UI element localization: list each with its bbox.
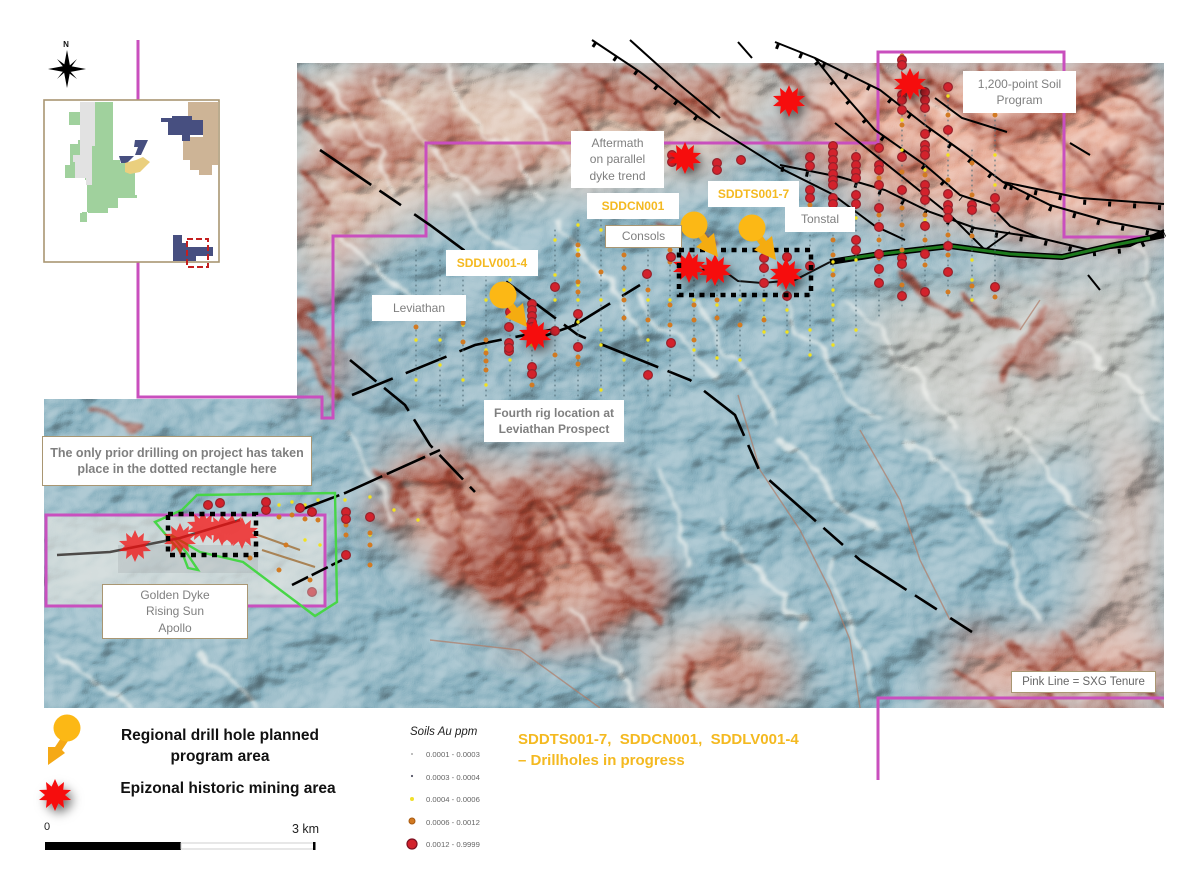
compass: N	[63, 40, 69, 49]
soils legend: Soils Au ppm	[410, 726, 478, 738]
soil sample grids	[250, 56, 995, 580]
soils legend	[407, 726, 481, 849]
historic mining stars on the main map	[519, 68, 926, 351]
label: soil program	[963, 71, 1076, 113]
terrain relief	[44, 63, 1164, 708]
label: Aftermath: on parallel	[590, 152, 645, 166]
historic dyke line	[57, 520, 240, 555]
scale bar: 3 km	[292, 822, 319, 836]
label: Consols	[605, 225, 682, 248]
white ridges	[60, 75, 1160, 708]
compass	[48, 40, 86, 88]
drillholes in progress note	[518, 731, 799, 769]
drillholes in progress note: SDDTS001-7, SDDCN001, SDDLV001-4	[518, 731, 799, 748]
label: SDDLV001-4: SDDLV001-4	[457, 256, 527, 270]
label: fourth rig: Leviathan Prospect	[499, 422, 609, 436]
label: Golden Dyke group	[102, 584, 248, 639]
dashed dyke lines	[292, 150, 972, 632]
label: prior drilling: The only prior drilling on project has taken	[50, 446, 304, 460]
legend marker: drill hole	[48, 714, 80, 765]
channel lines	[430, 300, 1040, 708]
hazy image over the Golden Dyke area	[46, 515, 326, 606]
label: fourth rig	[484, 400, 624, 442]
elevation colouring	[278, 63, 1164, 708]
high grade soil samples	[204, 56, 999, 596]
soils legend: 0.0003 - 0.0004	[426, 773, 481, 782]
label: tenure key: Pink Line = SXG Tenure	[1022, 676, 1145, 688]
soils legend: 0.0006 - 0.0012	[426, 818, 480, 827]
label: prior drilling: place in the dotted rectangle here	[77, 462, 277, 476]
label: Tonstal	[785, 207, 855, 232]
legend text: drill hole: program area	[170, 748, 270, 765]
drill marker: SDDTS001-7	[738, 214, 776, 260]
brown ridges	[90, 66, 1164, 708]
label: tenure key	[1011, 671, 1156, 693]
legend text: drill hole	[121, 727, 319, 765]
soils legend: 0.0004 - 0.0006	[426, 795, 480, 804]
label: Aftermath: dyke trend	[589, 169, 646, 183]
scale bar: 0	[44, 821, 50, 833]
historic mining stars in the hazy area	[119, 511, 258, 562]
label: Golden Dyke group: Apollo	[158, 621, 192, 635]
label: fourth rig: Fourth rig location at	[494, 406, 614, 420]
faults	[592, 40, 1164, 290]
label: SDDLV001-4	[446, 250, 538, 276]
label: SDDCN001	[587, 193, 679, 219]
drill marker: SDDLV001-4	[490, 282, 527, 327]
drillholes in progress note: – Drillholes in progress	[518, 752, 685, 769]
label: SDDTS001-7: SDDTS001-7	[718, 187, 789, 201]
legend marker: mining star	[39, 779, 71, 811]
label: Leviathan	[372, 295, 466, 321]
dotted rectangles	[168, 250, 811, 555]
label: Consols: Consols	[622, 229, 665, 243]
soils legend: 0.0001 - 0.0003	[426, 750, 480, 759]
label: Golden Dyke group: Golden Dyke	[140, 588, 210, 602]
label: Aftermath	[571, 131, 664, 188]
legend text: mining: Epizonal historic mining area	[120, 780, 336, 797]
label: prior drilling	[42, 436, 312, 486]
label: Golden Dyke group: Rising Sun	[146, 604, 204, 618]
soils legend: 0.0012 - 0.9999	[426, 840, 480, 849]
label: Leviathan: Leviathan	[393, 301, 445, 315]
label: soil program: 1,200-point Soil	[978, 76, 1061, 90]
colour zones	[297, 63, 1164, 708]
scale bar	[44, 821, 319, 850]
location inset	[44, 100, 219, 267]
label: Tonstal: Tonstal	[801, 212, 839, 226]
label: Aftermath: Aftermath	[591, 136, 644, 150]
tenure boundary	[46, 40, 1164, 780]
legend text: drill hole: Regional drill hole planned	[121, 727, 319, 744]
fault teeth	[593, 44, 1165, 254]
hillshade	[44, 63, 1164, 708]
label: soil program: Program	[996, 93, 1042, 107]
exploration area outline	[155, 493, 337, 616]
drill marker: SDDCN001	[680, 212, 718, 257]
mineralised dyke	[690, 235, 1164, 283]
label: SDDCN001: SDDCN001	[602, 199, 664, 213]
label: SDDTS001-7	[708, 181, 799, 207]
